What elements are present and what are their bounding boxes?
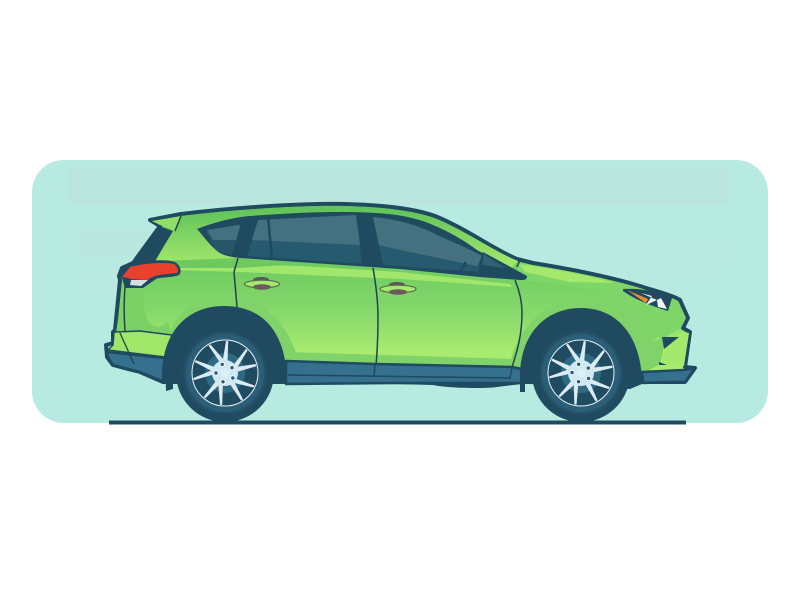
tail light bbox=[120, 260, 181, 288]
ground shadow bbox=[109, 420, 686, 424]
roof panel bbox=[156, 206, 518, 270]
lower body shade bbox=[288, 352, 512, 368]
front wheel bbox=[530, 322, 632, 424]
shoulder shade bbox=[165, 261, 300, 268]
rear quarter shade bbox=[116, 276, 172, 336]
rear wheel arch bbox=[162, 306, 287, 384]
front mudflap bbox=[520, 370, 525, 392]
rear quarter glass bbox=[207, 225, 240, 255]
front wheel arch bbox=[520, 308, 642, 389]
rear hatch glass bbox=[134, 226, 173, 264]
sill underside bbox=[285, 372, 522, 388]
front arch shade bbox=[508, 299, 664, 382]
body shell bbox=[106, 204, 695, 382]
hood highlight bbox=[519, 264, 615, 283]
rear wheel bbox=[176, 324, 274, 422]
spoiler bbox=[152, 216, 181, 231]
window vent post bbox=[459, 262, 466, 273]
shoulder highlight bbox=[155, 262, 512, 287]
door seams bbox=[120, 216, 522, 376]
side windows bbox=[197, 212, 527, 280]
rear bumper bbox=[107, 331, 172, 382]
window frame bbox=[197, 212, 527, 280]
car body bbox=[106, 204, 695, 382]
headlight bbox=[623, 289, 672, 311]
door handle: rear bbox=[244, 277, 280, 290]
front glass bbox=[373, 217, 482, 272]
front bumper lime panel bbox=[660, 332, 689, 366]
middle glass bbox=[247, 215, 362, 264]
background panel bbox=[32, 160, 768, 423]
fog vent bbox=[659, 362, 667, 365]
rear bumper upper bbox=[108, 331, 172, 357]
sill panel bbox=[286, 361, 522, 384]
side mirror bbox=[480, 252, 527, 280]
rear mudflap bbox=[165, 360, 173, 391]
front splitter bbox=[642, 368, 695, 383]
front bumper bbox=[642, 332, 695, 383]
lower front grille bbox=[662, 337, 679, 349]
door handle: front bbox=[380, 282, 416, 295]
hood panel bbox=[517, 262, 686, 340]
side sill bbox=[285, 361, 522, 388]
rear bumper lower bbox=[107, 352, 165, 382]
door pillar divider bbox=[268, 217, 272, 259]
front fascia shade bbox=[645, 338, 666, 372]
rear arch shade bbox=[165, 297, 300, 382]
